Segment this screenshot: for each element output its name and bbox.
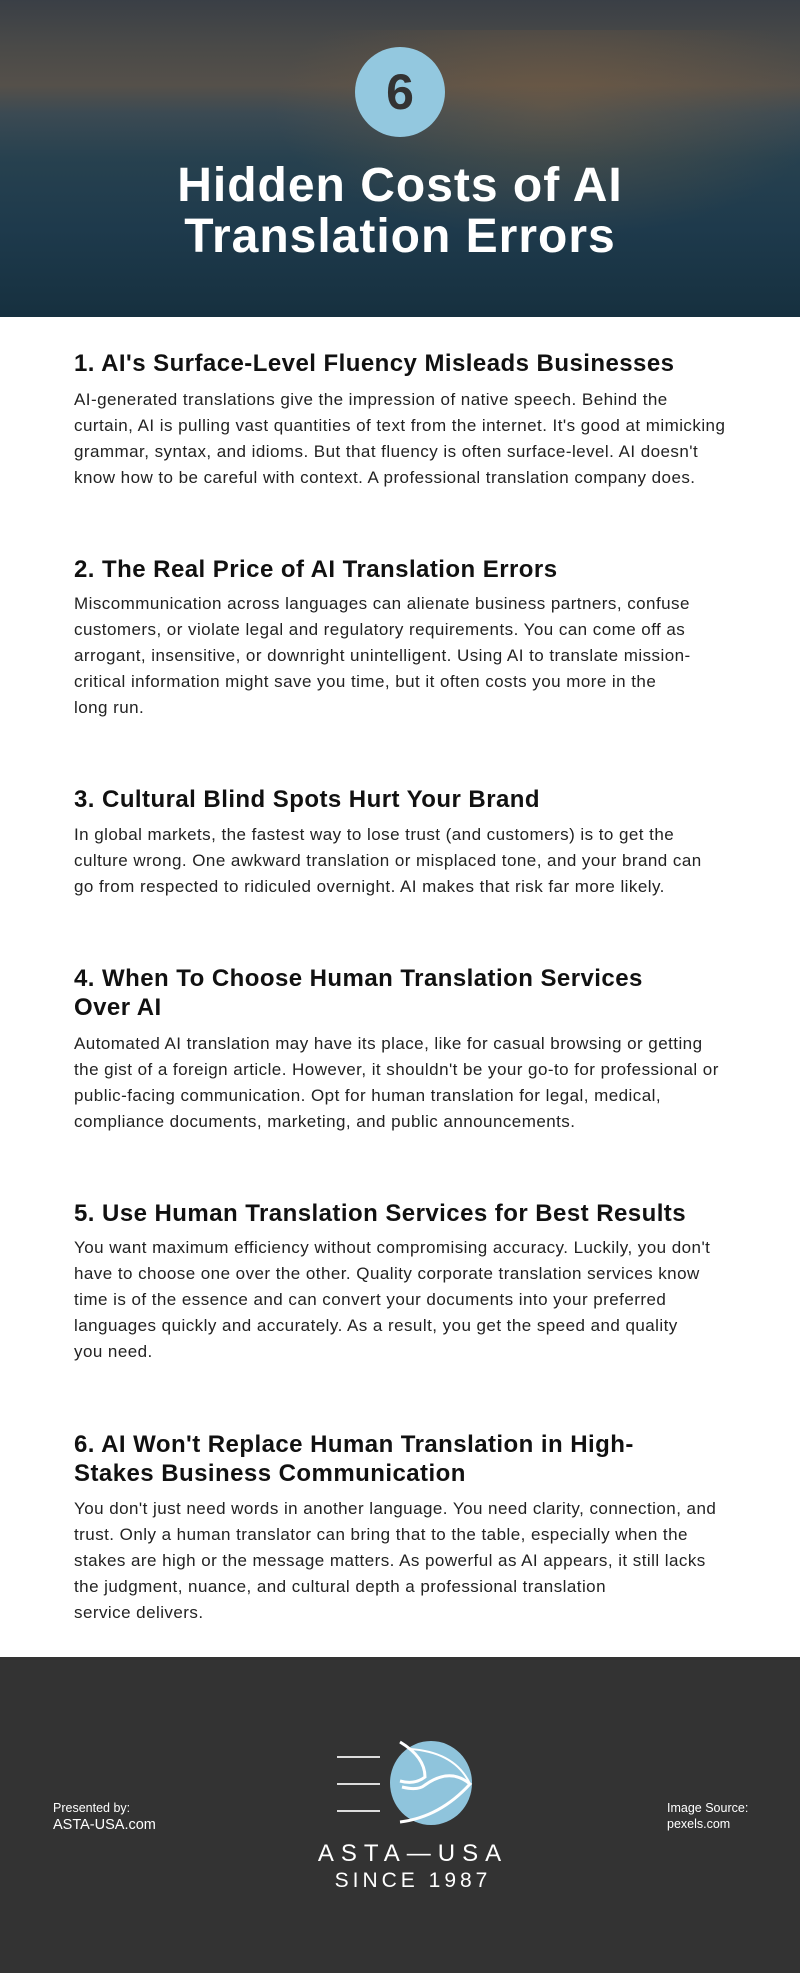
presented by: ASTA-USA.com [53, 1817, 156, 1833]
section 4 text [74, 1034, 719, 1131]
section 1 text: know how to be careful with context. A professional translation company does. [74, 468, 695, 487]
image source: pexels.com [667, 1817, 730, 1831]
section 2 text: customers, or violate legal and regulatory requirements. You can come off as [74, 620, 685, 639]
section 6 text: the judgment, nuance, and cultural depth a professional translation [74, 1577, 606, 1596]
section 6 heading: Stakes Business Communication [74, 1460, 466, 1487]
section 2 text [74, 594, 691, 717]
section 2 heading: 2. The Real Price of AI Translation Errors [74, 556, 558, 583]
title [177, 159, 623, 263]
section 3 text [74, 825, 702, 896]
section 3 text: In global markets, the fastest way to lose trust (and customers) is to get the [74, 825, 674, 844]
section 1 text: AI-generated translations give the impression of native speech. Behind the [74, 390, 668, 409]
section 6 heading: 6. AI Won't Replace Human Translation in High- [74, 1431, 634, 1458]
title: Hidden Costs of AI [177, 159, 623, 212]
section 4 text: compliance documents, marketing, and public announcements. [74, 1112, 575, 1131]
footer [0, 1657, 800, 1973]
section 5 text: time is of the essence and can convert your documents into your preferred [74, 1290, 666, 1309]
section 3 text: culture wrong. One awkward translation or misplaced tone, and your brand can [74, 851, 702, 870]
since 1987: SINCE 1987 [335, 1869, 491, 1892]
section 6 heading [74, 1431, 634, 1487]
section 6 text: trust. Only a human translator can bring that to the table, especially when the [74, 1525, 688, 1544]
horizon glow [250, 30, 800, 250]
section 6 text: stakes are high or the message matters. As powerful as AI appears, it still lacks [74, 1551, 706, 1570]
section 3 heading: 3. Cultural Blind Spots Hurt Your Brand [74, 786, 540, 813]
section 5 text: languages quickly and accurately. As a result, you get the speed and quality [74, 1316, 678, 1335]
header banner [0, 0, 800, 317]
image source [667, 1801, 748, 1831]
section 5 text: have to choose one over the other. Quality corporate translation services know [74, 1264, 700, 1283]
section 2 text: Miscommunication across languages can alienate business partners, confuse [74, 594, 690, 613]
logo icon [337, 1740, 472, 1825]
title: Translation Errors [184, 210, 616, 263]
section 6 text: You don't just need words in another language. You need clarity, connection, and [74, 1499, 716, 1518]
section 1 text: grammar, syntax, and idioms. But that fluency is often surface-level. AI doesn't [74, 442, 698, 461]
section 3 text: go from respected to ridiculed overnight. AI makes that risk far more likely. [74, 877, 665, 896]
number circle: 6 [386, 64, 414, 120]
section 4 heading: Over AI [74, 994, 162, 1021]
section 2 text: arrogant, insensitive, or downright unintelligent. Using AI to translate mission- [74, 646, 691, 665]
presented by: Presented by: [53, 1801, 130, 1815]
presented by [53, 1801, 156, 1833]
section 2 text: critical information might save you time, but it often costs you more in the [74, 672, 656, 691]
number circle [355, 47, 445, 137]
section 5 text [74, 1238, 710, 1361]
logo wordmark: ASTA—USA [318, 1840, 508, 1867]
section 1 text [74, 390, 725, 487]
section 5 text: you need. [74, 1342, 153, 1361]
section 4 text: the gist of a foreign article. However, it shouldn't be your go-to for professional or [74, 1060, 719, 1079]
section 4 heading [74, 965, 643, 1021]
section 4 heading: 4. When To Choose Human Translation Services [74, 965, 643, 992]
section 6 text [74, 1499, 716, 1622]
section 4 text: public-facing communication. Opt for human translation for legal, medical, [74, 1086, 661, 1105]
section 5 text: You want maximum efficiency without compromising accuracy. Luckily, you don't [74, 1238, 710, 1257]
section 1 heading: 1. AI's Surface-Level Fluency Misleads Businesses [74, 350, 674, 377]
section 1 text: curtain, AI is pulling vast quantities of text from the internet. It's good at mimicking [74, 416, 725, 435]
section 2 text: long run. [74, 698, 144, 717]
section 6 text: service delivers. [74, 1603, 204, 1622]
section 4 text: Automated AI translation may have its place, like for casual browsing or getting [74, 1034, 702, 1053]
section 5 heading: 5. Use Human Translation Services for Best Results [74, 1200, 686, 1227]
image source: Image Source: [667, 1801, 748, 1815]
